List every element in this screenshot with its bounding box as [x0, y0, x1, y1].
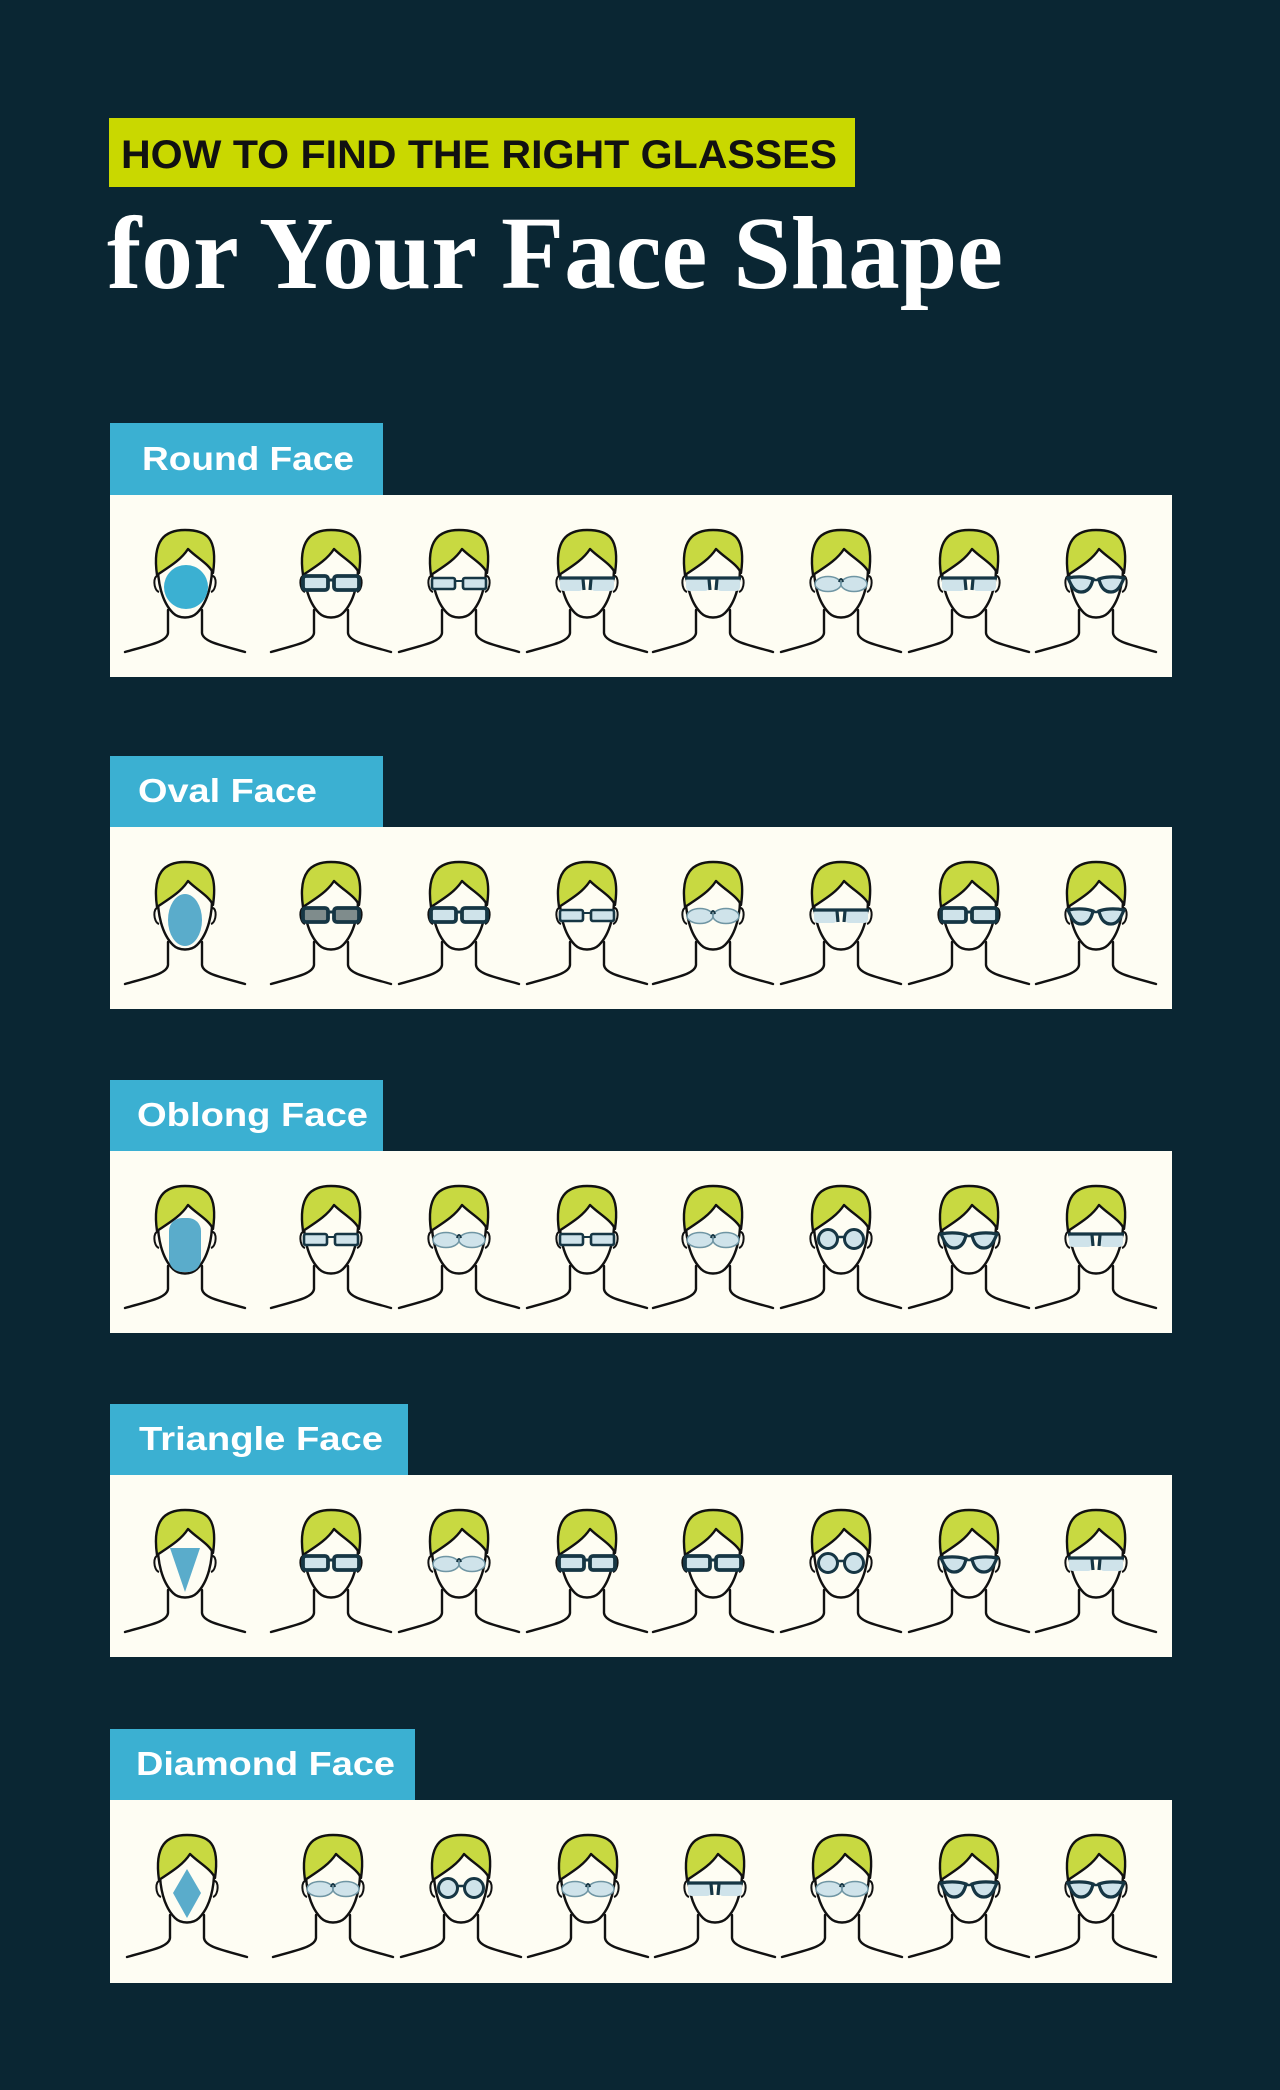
faces with glasses	[273, 1835, 1156, 1957]
face: oblong shape	[125, 1186, 245, 1308]
label: round face	[110, 423, 383, 495]
panel: round face	[110, 423, 1172, 677]
label: triangle face: Triangle Face	[139, 1420, 383, 1457]
faces with glasses	[271, 862, 1156, 984]
label: diamond face	[110, 1729, 415, 1800]
label: triangle face	[110, 1404, 408, 1475]
title: for Your Face Shape	[107, 196, 1003, 311]
panel: diamond face	[110, 1729, 1172, 1983]
label: oval face	[110, 756, 383, 827]
label: round face: Round Face	[142, 440, 354, 477]
faces with glasses	[271, 1186, 1156, 1308]
label: diamond face: Diamond Face	[136, 1745, 395, 1782]
panel: oblong face	[110, 1080, 1172, 1333]
label: oblong face	[110, 1080, 383, 1151]
face: round shape	[125, 530, 245, 652]
faces with glasses	[271, 530, 1156, 652]
faces with glasses	[271, 1510, 1156, 1632]
face: oval shape	[125, 862, 245, 984]
label: oblong face: Oblong Face	[137, 1096, 368, 1133]
title tag: HOW TO FIND THE RIGHT GLASSES	[121, 133, 837, 177]
panel: oval face	[110, 756, 1172, 1009]
label: oval face: Oval Face	[138, 772, 317, 809]
panel: triangle face	[110, 1404, 1172, 1657]
face: triangle shape	[125, 1510, 245, 1632]
title tag	[109, 118, 855, 187]
face: diamond shape	[127, 1835, 247, 1957]
